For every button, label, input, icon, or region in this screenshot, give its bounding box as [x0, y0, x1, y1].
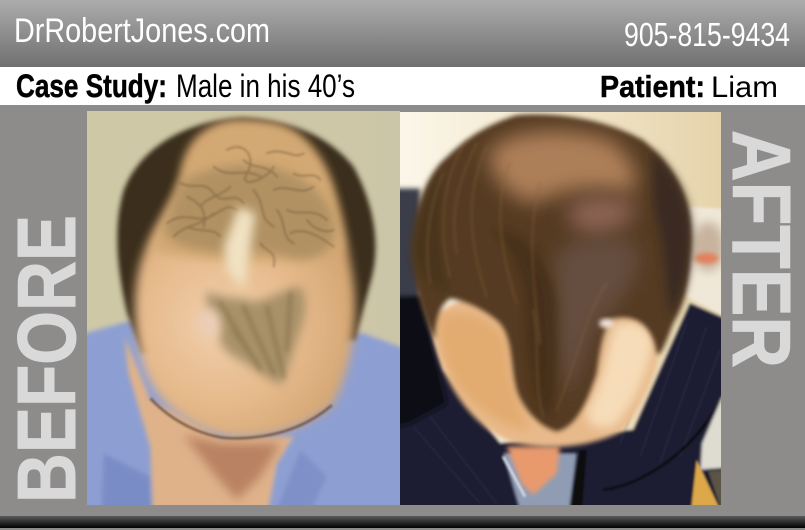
- case study label: Case Study:: [16, 68, 167, 104]
- crown haze: [164, 165, 335, 260]
- footer bar: [0, 516, 805, 528]
- dark backdrop: [400, 184, 424, 300]
- hair mass: [412, 114, 692, 432]
- lapel shadow: [603, 397, 722, 490]
- dark central strand: [493, 230, 558, 420]
- pale patch by tuft: [197, 308, 220, 338]
- wall lower right: [698, 394, 721, 472]
- before photo: [87, 111, 400, 505]
- light right forehead: [587, 322, 653, 428]
- bright scalp glint: [599, 319, 614, 328]
- after photo: [400, 112, 721, 505]
- patient label: Patient:: [600, 69, 705, 104]
- hair strands: [427, 140, 607, 417]
- table behind patient: [686, 206, 721, 316]
- suit: [400, 296, 721, 505]
- suit pinstripes: [622, 418, 690, 464]
- thin crown hair: [167, 147, 334, 267]
- patient value: Liam: [711, 71, 778, 104]
- header bar: [0, 0, 805, 67]
- shirt collar: [502, 450, 581, 505]
- tuft streaks: [220, 293, 290, 377]
- side hair: [117, 117, 376, 353]
- crown lighter thinning: [490, 131, 636, 203]
- case study band: [0, 67, 805, 105]
- bare midline strip: [224, 207, 255, 290]
- neck: [507, 447, 560, 495]
- brow line: [150, 398, 332, 438]
- shirt: [87, 320, 400, 505]
- outer dark rim: [650, 150, 690, 317]
- scalp: [135, 122, 355, 437]
- scalp: [430, 297, 663, 447]
- frontal tuft: [206, 287, 305, 385]
- upper scalp tint: [154, 122, 344, 261]
- orange left forehead: [439, 313, 530, 430]
- website heading: DrRobertJones.com: [14, 12, 270, 50]
- case study value: Male in his 40’s: [176, 68, 355, 104]
- yellow chair: [690, 458, 720, 505]
- grey-violet thin zone: [553, 237, 640, 397]
- before label: BEFORE: [0, 215, 93, 503]
- neck: [122, 338, 295, 505]
